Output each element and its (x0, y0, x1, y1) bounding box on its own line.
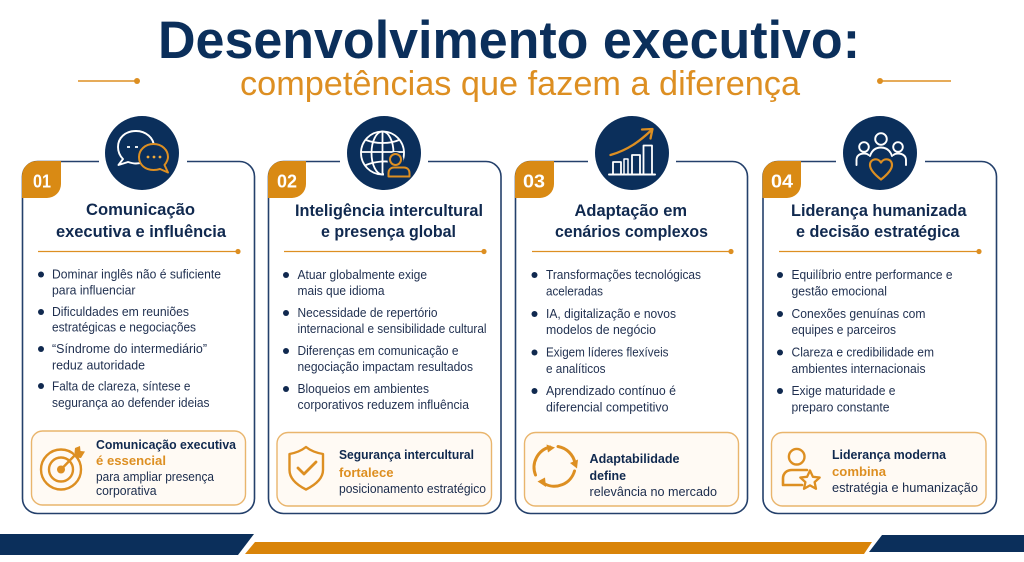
bullet list: “Síndrome do intermediário” (52, 341, 207, 356)
panel: card 03 (515, 116, 748, 514)
panel: card 01 (22, 116, 254, 514)
callout: relevância no mercado (590, 485, 717, 499)
subtitle: competências que fazem a diferença (240, 65, 800, 103)
bullet list: Dominar inglês não é suficiente (52, 266, 221, 282)
bullet list: equipes e parceiros (792, 322, 896, 337)
bullet list: aceleradas (546, 284, 603, 298)
number badge 04 (762, 161, 801, 198)
bullet list: Exigem líderes flexíveis (546, 344, 668, 360)
callout (277, 432, 492, 506)
heading (295, 201, 483, 241)
callout: Comunicação executiva (96, 438, 237, 452)
bullet list: internacional e sensibilidade cultural (298, 321, 486, 336)
bullet list: Diferenças em comunicação e (298, 343, 458, 358)
heading (56, 200, 227, 241)
callout: posicionamento estratégico (339, 482, 486, 496)
bullet list: Clareza e credibilidade em (792, 344, 934, 360)
header (78, 11, 951, 103)
bullet list: preparo constante (792, 400, 890, 414)
bullet list: Bloqueios em ambientes (298, 381, 429, 396)
number badge 03: 03 (523, 172, 545, 192)
callout (772, 432, 986, 506)
callout: estratégia e humanização (832, 481, 978, 495)
icon: globe and person (347, 116, 421, 190)
bullet list: Transformações tecnológicas (546, 267, 701, 282)
number badge 02: 02 (277, 172, 297, 192)
callout: para ampliar presença (96, 470, 214, 484)
bullet list: e analíticos (546, 361, 606, 376)
bullet list (532, 267, 701, 414)
bullet list: diferencial competitivo (546, 400, 668, 414)
callout: combina (832, 465, 887, 479)
heading: Comunicação (86, 200, 195, 219)
icon: cycle arrows (534, 444, 578, 487)
right accent line (877, 78, 951, 84)
bullet list: corporativos reduzem influência (298, 397, 470, 412)
bullet list: reduz autoridade (52, 358, 145, 372)
heading: Liderança humanizada (791, 201, 967, 220)
heading: Adaptação em (574, 201, 687, 220)
bullet list: IA, digitalização e novos (546, 306, 676, 321)
footer bars (0, 534, 1024, 555)
number badge 02 (268, 161, 306, 198)
icon: shield with check (290, 447, 323, 490)
callout: Liderança moderna (832, 448, 947, 462)
bullet list: Atuar globalmente exige (298, 267, 427, 282)
heading: e decisão estratégica (796, 222, 960, 241)
bullet list: segurança ao defender ideias (52, 395, 210, 410)
bullet list: mais que idioma (298, 283, 385, 298)
bullet list: gestão emocional (792, 284, 887, 298)
callout: Segurança intercultural (339, 448, 474, 462)
title: Desenvolvimento executivo: (158, 11, 860, 70)
icon: growth chart (595, 116, 669, 190)
panel: card 04 (762, 116, 996, 514)
bullet list (38, 266, 221, 410)
bullet list: ambientes internacionais (792, 361, 926, 376)
callout (32, 431, 246, 505)
panel: card 02 (268, 116, 501, 514)
bullet list: Equilíbrio entre performance e (792, 267, 952, 282)
callout: Adaptabilidade (590, 452, 680, 466)
heading: cenários complexos (555, 222, 708, 241)
number badge 03 (515, 161, 554, 198)
heading: executiva e influência (56, 222, 227, 241)
number badge 01: 01 (33, 172, 51, 192)
bullet list (283, 267, 486, 412)
number badge 01 (22, 161, 61, 198)
callout: corporativa (96, 484, 157, 498)
number badge 04: 04 (771, 172, 793, 192)
bullet list: negociação impactam resultados (298, 359, 473, 374)
bullet list: Necessidade de repertório (298, 305, 438, 320)
left accent line (78, 78, 140, 84)
bullet list: para influenciar (52, 282, 136, 298)
bullet list: Conexões genuínas com (792, 306, 926, 321)
icon: target (41, 446, 85, 490)
bullet list: Exige maturidade e (792, 383, 896, 398)
icon: people and heart (843, 116, 917, 190)
bullet list: Dificuldades em reuniões (52, 304, 189, 319)
callout: fortalece (339, 466, 394, 480)
bullet list: Falta de clareza, síntese e (52, 378, 190, 394)
bullet list: estratégicas e negociações (52, 320, 196, 334)
callout: define (590, 469, 626, 483)
heading (555, 201, 708, 241)
heading: e presença global (321, 222, 456, 241)
callout (524, 432, 738, 506)
icon: speech bubbles (105, 116, 179, 190)
callout: é essencial (96, 454, 166, 468)
bullet list: modelos de negócio (546, 322, 656, 337)
bullet list (777, 267, 952, 414)
heading (791, 201, 967, 241)
heading: Inteligência intercultural (295, 201, 483, 220)
icon: person with star (783, 449, 820, 489)
bullet list: Aprendizado contínuo é (546, 383, 676, 398)
